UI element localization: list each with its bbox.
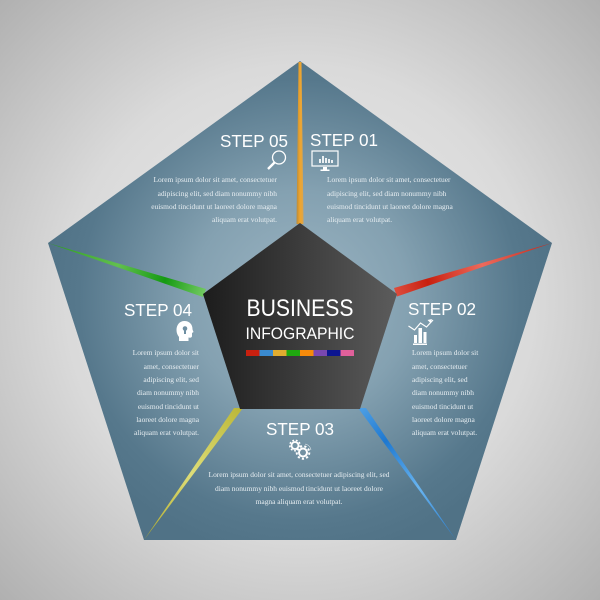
divider wedge: orange	[296, 62, 304, 224]
text: step 03 body: Lorem ipsum dolor sit amet, consectetuer adipiscing elit, sed	[209, 470, 390, 479]
panel: central pentagon	[203, 223, 397, 409]
text: step 03 body	[209, 470, 390, 506]
step 02	[408, 299, 479, 437]
divider wedge: green	[48, 243, 206, 297]
divider wedge: red	[394, 243, 552, 296]
text: step 01 body	[327, 175, 453, 224]
step 04	[124, 300, 200, 437]
text: step 05 body: Lorem ipsum dolor sit amet, consectetuer	[153, 175, 278, 184]
icon: growth chart	[408, 319, 433, 345]
icon: magnifier	[268, 151, 286, 169]
title: INFOGRAPHIC	[246, 324, 354, 343]
text: step 05 body	[151, 175, 278, 224]
text: step 04 body: laoreet dolore magna	[136, 415, 200, 424]
text: step 03 body: diam nonummy nibh euismod tincidunt ut laoreet dolore	[215, 484, 384, 493]
icon: head with bulb	[176, 321, 194, 341]
text: step 05 body: euismod tincidunt ut laoreet dolore magna	[151, 202, 278, 211]
text: step 04 body: aliquam erat volutpat.	[134, 428, 199, 437]
text: step 04 body: amet, consectetuer	[144, 362, 200, 371]
text: step 02 body: aliquam erat volutpat.	[412, 428, 477, 437]
text: step 05 body: aliquam erat volutpat.	[212, 215, 277, 224]
heading: step 04: STEP 04	[124, 300, 192, 320]
divider wedge: blue	[358, 408, 456, 540]
step 01	[310, 130, 453, 224]
step 03	[209, 419, 390, 506]
text: step 02 body: Lorem ipsum dolor sit	[412, 348, 479, 357]
title	[246, 295, 354, 343]
divider wedge: yellow	[144, 408, 243, 540]
text: step 04 body: adipiscing elit, sed	[143, 375, 199, 384]
text: step 01 body: adipiscing elit, sed diam nonummy nibh	[327, 189, 447, 198]
text: step 04 body	[133, 348, 200, 437]
colour bar	[246, 350, 354, 356]
heading: step 03: STEP 03	[266, 419, 334, 439]
text: step 01 body: aliquam erat volutpat.	[327, 215, 392, 224]
text: step 04 body: Lorem ipsum dolor sit	[133, 348, 200, 357]
heading: step 01: STEP 01	[310, 130, 378, 150]
text: step 03 body: magna aliquam erat volutpat.	[256, 497, 343, 506]
text: step 04 body: euismod tincidunt ut	[138, 402, 200, 411]
text: step 05 body: adipiscing elit, sed diam nonummy nibh	[158, 189, 277, 198]
text: step 02 body: amet, consectetuer	[412, 362, 468, 371]
heading: step 02: STEP 02	[408, 299, 476, 319]
text: step 01 body: Lorem ipsum dolor sit amet, consectetuer	[327, 175, 451, 184]
icon: gears	[290, 440, 311, 459]
text: step 02 body	[412, 348, 479, 437]
text: step 04 body: diam nonummy nibh	[137, 388, 199, 397]
panel: outer pentagon	[48, 61, 552, 540]
title: BUSINESS	[246, 295, 354, 322]
text: step 02 body: laoreet dolore magna	[412, 415, 475, 424]
text: step 02 body: euismod tincidunt ut	[412, 402, 474, 411]
text: step 02 body: diam nonummy nibh	[412, 388, 474, 397]
text: step 02 body: adipiscing elit, sed	[412, 375, 468, 384]
icon: monitor with chart	[312, 151, 338, 171]
heading: step 05: STEP 05	[220, 131, 288, 151]
text: step 01 body: euismod tincidunt ut laoreet dolore magna	[327, 202, 453, 211]
step 05	[151, 131, 288, 224]
